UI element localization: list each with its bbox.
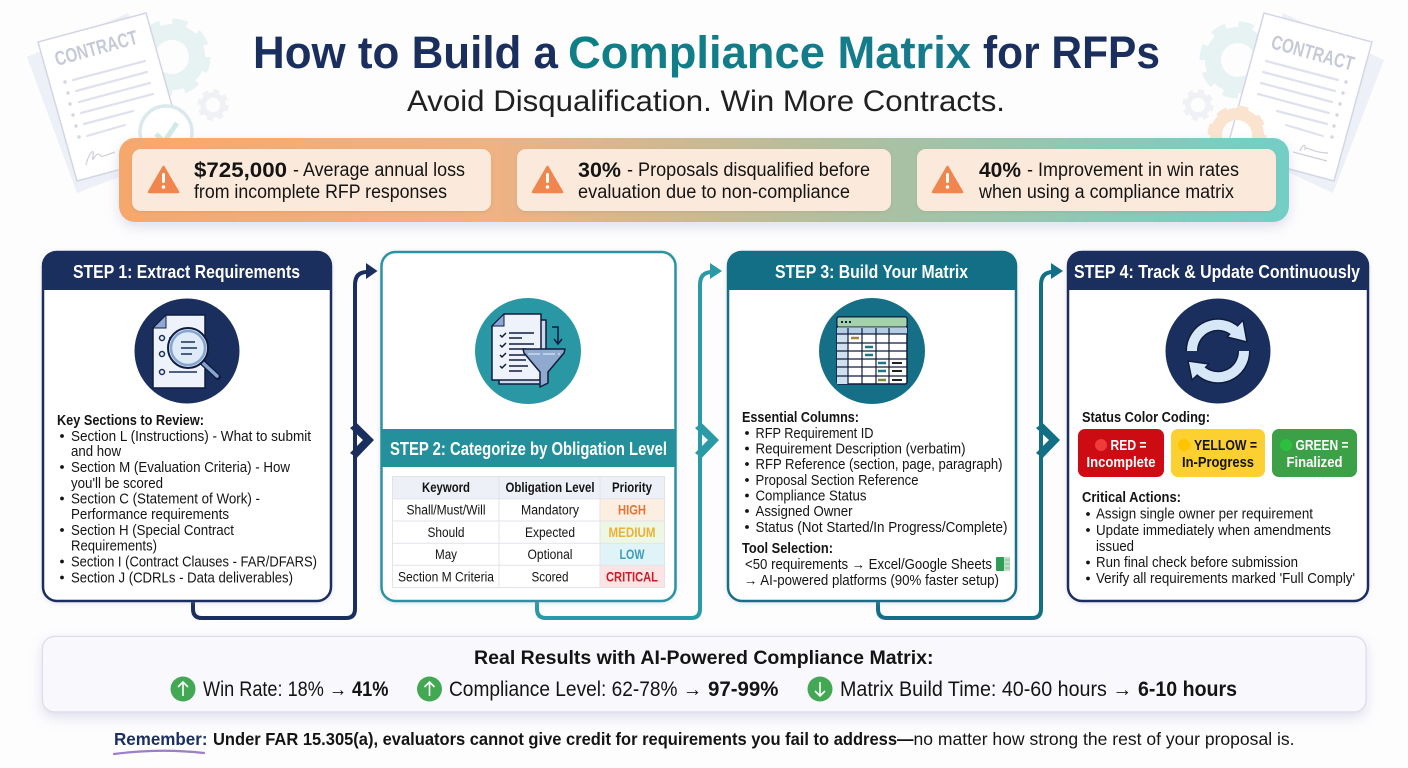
heading: step 3: STEP 3: Build Your Matrix [775,261,969,282]
alert card: 40%: when using a compliance matrix [978,182,1234,203]
result: win rate: 41% [352,678,389,701]
text: critical actions [1082,490,1355,587]
alert card: 30%: - Proposals disqualified before [627,160,870,181]
alert card: 40%: - Improvement in win rates [1027,160,1239,181]
title: How to Build a [253,27,559,78]
text: essential columns: RFP Requirement ID [756,426,874,442]
heading: real results: Real Results with AI-Powered Compliance Matrix: [474,648,934,669]
result: compliance level: Compliance Level: 62-78% → [449,678,702,701]
table: obligation levels [392,476,665,588]
table: obligation levels: CRITICAL [606,570,658,584]
panel: real results [42,636,1366,712]
text: key sections to review: Section L (Instructions) - What to submit [71,429,311,445]
table: obligation levels: Shall/Must/Will [406,502,486,518]
text: key sections to review: Key Sections to Review: [57,413,204,429]
table: obligation levels: Optional [528,547,572,562]
illustration: left contract and gears: CONTRACT [52,27,140,71]
alert card: $725,000: - Average annual loss [293,160,465,181]
callout: remember: Remember: [114,729,208,749]
result: matrix build time: 6-10 hours [1138,678,1237,701]
text: essential columns: Assigned Owner [756,504,853,520]
table: obligation levels: LOW [620,547,645,562]
icon: spreadsheet app [996,557,1010,571]
result: matrix build time: Matrix Build Time: 40-60 hours → [840,678,1132,701]
result: win rate: Win Rate: 18% → [203,678,347,701]
text: key sections to review: Requirements) [71,538,157,554]
alert card: 30%: 30% [578,159,621,182]
table: obligation levels: Scored [532,570,568,584]
heading: step 1 [42,251,332,290]
heading: step 1: STEP 1: Extract Requirements [73,261,300,282]
table: obligation levels: HIGH [618,502,646,518]
text: key sections to review: Section M (Evaluation Criteria) - How [71,460,290,476]
table: obligation levels: Should [428,525,464,540]
arrow: step 2 to step 3 [537,263,722,618]
text: critical actions: Update immediately when amendments [1096,523,1331,539]
alert card: 40%: 40% [979,159,1021,182]
icon: document with magnifier [134,298,240,404]
table: obligation levels: MEDIUM [608,525,656,540]
alert card: 30% [517,149,891,211]
heading: step 4: STEP 4: Track & Update Continuously [1074,261,1361,282]
icon: warning triangle [149,167,178,192]
table: obligation levels: Obligation Level [506,480,594,495]
title [253,27,1160,78]
icon: warning triangle [533,167,562,192]
text: essential columns: Proposal Section Reference [756,473,918,489]
badge: red incomplete: RED = [1110,437,1147,454]
panel: step 2 [381,252,676,601]
arrow: step 3 to step 4 [878,263,1063,618]
heading: step 3 [727,251,1017,290]
icon: documents and funnel [475,298,581,404]
icon: refresh arrows [1166,298,1270,404]
illustration: right contract and gears [1184,13,1384,193]
badge: green finalized [1272,429,1357,477]
text: essential columns: Compliance Status [756,488,866,504]
alert card: 30%: evaluation due to non-compliance [578,182,850,203]
heading: step 4 [1067,251,1369,290]
heading: step 2: STEP 2: Categorize by Obligation Level [390,438,667,459]
table: obligation levels: Expected [525,525,575,540]
text: essential columns: RFP Reference (section, page, paragraph) [756,457,1002,473]
alert card: $725,000: from incomplete RFP responses [194,182,447,203]
text: critical actions: Run final check before submission [1096,555,1298,571]
text: key sections to review: Performance requirements [71,507,229,523]
table: obligation levels: May [435,547,457,562]
callout: remember: no matter how strong the rest of your proposal is. [914,729,1294,749]
text: key sections to review: Section C (Statement of Work) - [71,492,260,508]
text: critical actions: Verify all requirements marked 'Full Comply' [1096,571,1355,587]
subtitle: Avoid Disqualification. Win More Contracts. [407,85,1005,118]
badge: yellow in-progress: YELLOW = [1194,437,1257,454]
icon: spreadsheet matrix [819,298,925,404]
text: essential columns: Status (Not Started/In Progress/Complete) [756,520,1008,536]
table: obligation levels: Section M Criteria [398,570,494,584]
panel: step 3 [727,251,1017,601]
alert card: $725,000: $725,000 [194,159,287,182]
illustration: right contract and gears: CONTRACT [1269,32,1356,76]
text: critical actions: issued [1096,539,1134,555]
badge: green finalized: Finalized [1286,454,1342,471]
title: for RFPs [983,27,1160,78]
table: obligation levels: Mandatory [521,502,579,518]
panel: step 4 [1067,251,1369,601]
result: matrix build time [808,676,1237,702]
alert card: $725,000 [132,149,491,211]
text: essential columns: Essential Columns: [742,410,859,426]
text: key sections to review: you'll be scored [71,476,163,492]
panel: step 1 [42,251,332,601]
icon: warning triangle [933,167,962,192]
callout: remember: Under FAR 15.305(a), evaluators cannot give credit for requirements you fail to address— [213,729,914,749]
text: tool selection: → AI-powered platforms (90% faster setup) [744,573,999,589]
heading: status colour coding: Status Color Coding: [1082,410,1210,426]
arrow: step 1 to step 2 [193,263,378,618]
illustration: left contract and gears [27,13,227,193]
text: key sections to review: Section J (CDRLs - Data deliverables) [71,570,293,586]
text: essential columns [742,410,1008,536]
callout: remember [114,729,1294,754]
text: key sections to review: Section H (Special Contract [71,523,234,539]
table: obligation levels: Keyword [422,480,470,495]
badge: red incomplete [1078,429,1164,477]
text: tool selection: <50 requirements → Excel/Google Sheets [745,557,992,573]
text: key sections to review [57,413,317,586]
alert card: 40% [917,149,1276,211]
heading: step 2 [381,429,676,467]
badge: yellow in-progress: In-Progress [1182,454,1254,471]
badge: red incomplete: Incomplete [1086,454,1156,471]
text: key sections to review: and how [71,444,121,460]
text: tool selection: Tool Selection: [742,541,833,557]
text: critical actions: Assign single owner per requirement [1096,506,1313,522]
result: compliance level: 97-99% [708,678,779,701]
badge: green finalized: GREEN = [1296,437,1349,454]
text: tool selection [742,541,999,589]
alert band [119,138,1289,222]
text: key sections to review: Section I (Contract Clauses - FAR/DFARS) [71,554,317,570]
badge: yellow in-progress [1171,429,1265,477]
table: obligation levels: Priority [612,480,652,495]
text: essential columns: Requirement Description (verbatim) [756,442,966,458]
title: Compliance Matrix [568,27,971,78]
text: critical actions: Critical Actions: [1082,490,1181,506]
